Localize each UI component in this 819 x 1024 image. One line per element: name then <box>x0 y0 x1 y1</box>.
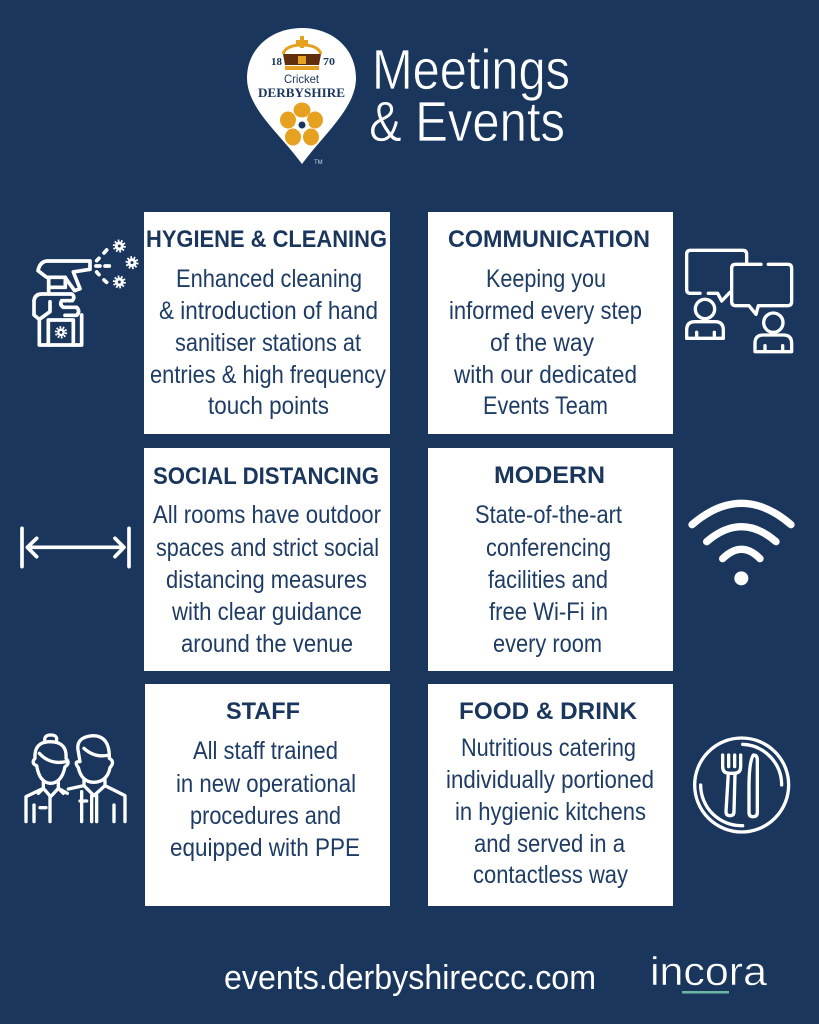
panel: communication: Keeping you <box>486 265 606 293</box>
panel: communication: with our dedicated <box>453 361 637 389</box>
website address: events.derbyshireccc.com <box>224 959 596 997</box>
panel: communication: Events Team <box>483 392 608 420</box>
panel: hygiene and cleaning: HYGIENE & CLEANING <box>146 226 387 253</box>
panel: food and drink: and served in a <box>474 830 625 858</box>
panel: modern: MODERN <box>494 462 605 489</box>
panel: hygiene and cleaning: touch points <box>208 392 329 420</box>
panel: food and drink: FOOD & DRINK <box>459 698 638 725</box>
panel: modern: facilities and <box>488 566 608 594</box>
panel: staff <box>145 684 390 906</box>
logo: Cricket Derbyshire shield: 70 <box>323 56 336 68</box>
icon: wifi <box>692 503 791 585</box>
panel: communication: COMMUNICATION <box>448 226 650 253</box>
icon: two staff members <box>26 735 125 822</box>
icon: two people talking <box>687 250 792 352</box>
logo: Cricket Derbyshire shield: DERBYSHIRE <box>258 85 345 100</box>
panel: social distancing: All rooms have outdoor <box>153 501 381 529</box>
panel: food and drink: individually portioned <box>446 766 654 794</box>
panel: communication <box>428 212 673 434</box>
panel: food and drink: in hygienic kitchens <box>455 798 646 826</box>
icon: distance arrow <box>22 528 129 567</box>
title: & Events <box>369 90 565 154</box>
panel: hygiene and cleaning: sanitiser stations at <box>175 329 361 357</box>
panel: social distancing: distancing measures <box>166 566 367 594</box>
panel: social distancing: SOCIAL DISTANCING <box>153 463 379 490</box>
panel: staff: All staff trained <box>193 737 338 765</box>
logo: incora: incora <box>650 950 768 994</box>
panel: social distancing: around the venue <box>181 630 353 658</box>
panel: communication: of the way <box>490 329 594 357</box>
panel: hygiene and cleaning: & introduction of hand <box>159 297 378 325</box>
panel: staff: equipped with PPE <box>170 834 360 862</box>
logo: Cricket Derbyshire shield: 18 <box>271 56 282 68</box>
panel: social distancing: spaces and strict social <box>156 534 379 562</box>
panel: food and drink: contactless way <box>473 861 628 889</box>
logo: Cricket Derbyshire shield: TM <box>314 160 323 166</box>
panel: modern: every room <box>493 630 602 658</box>
panel: hygiene and cleaning: Enhanced cleaning <box>176 265 362 293</box>
panel: social distancing <box>144 448 390 671</box>
panel: modern: conferencing <box>486 534 611 562</box>
title <box>369 38 570 154</box>
panel: staff: procedures and <box>190 802 341 830</box>
icon: spray bottle <box>34 241 137 345</box>
panel: food and drink: Nutritious catering <box>461 734 636 762</box>
panel: hygiene and cleaning: entries & high frequency <box>150 361 386 389</box>
panel: modern: free Wi-Fi in <box>489 598 608 626</box>
panel: staff: in new operational <box>176 770 356 798</box>
logo: Cricket Derbyshire shield: Cricket <box>284 72 320 86</box>
panel: modern: State-of-the-art <box>475 501 622 529</box>
panel: hygiene and cleaning <box>144 212 390 434</box>
title: Meetings <box>372 38 570 102</box>
icon: plate with fork and knife <box>695 738 789 832</box>
panel: modern <box>428 448 673 671</box>
panel: staff: STAFF <box>226 698 300 725</box>
panel: food and drink <box>428 684 673 906</box>
panel: communication: informed every step <box>449 297 642 325</box>
logo: Cricket Derbyshire shield <box>247 28 356 166</box>
panel: social distancing: with clear guidance <box>171 598 362 626</box>
